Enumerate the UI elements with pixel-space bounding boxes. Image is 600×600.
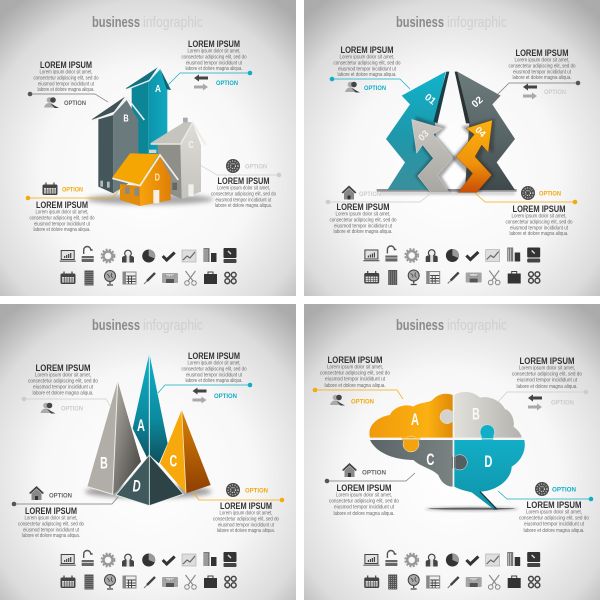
callout D: eiusmod tempor incididunt ut: [34, 222, 90, 228]
callout C: labore et dolore magna aliqua.: [217, 528, 275, 534]
callout A: labore et dolore magna aliqua.: [186, 66, 242, 72]
callout D: [26, 182, 122, 233]
callout 01: OPTION: [364, 85, 386, 92]
callout A: labore et dolore magna aliqua.: [324, 383, 386, 389]
callout B: LOREM IPSUM: [40, 60, 92, 70]
callout C: consectetur adipiscing elit, sed do: [213, 516, 279, 522]
callout B: labore et dolore magna aliqua.: [32, 390, 94, 396]
callout D: labore et dolore magna aliqua.: [524, 528, 584, 534]
callout 04: labore et dolore magna aliqua.: [510, 231, 568, 237]
pyramids illustration: [85, 352, 212, 506]
callout 03: OPTION: [359, 191, 381, 198]
icon rows: 00:235: [469, 578, 479, 582]
arrows illustration: 01: [422, 92, 438, 108]
brain illustration: C: [426, 450, 434, 469]
callout 01: [330, 45, 410, 92]
houses illustration: [87, 67, 213, 206]
callout 03: eiusmod tempor incididunt ut: [334, 224, 392, 230]
callout C: [325, 463, 415, 517]
icon rows: 00:235: [165, 274, 175, 278]
panel: houses: [0, 0, 296, 296]
callout A: LOREM IPSUM: [188, 39, 240, 49]
callout A: labore et dolore magna aliqua.: [186, 378, 242, 384]
callout C: eiusmod tempor incididunt ut: [218, 522, 274, 528]
pyramids illustration: A: [137, 416, 145, 435]
callout C: labore et dolore magna aliqua.: [334, 511, 394, 517]
callout 01: LOREM IPSUM: [340, 45, 394, 55]
callout D: LOREM IPSUM: [36, 200, 88, 210]
pyramids illustration: B: [100, 453, 108, 472]
callout A: LOREM IPSUM: [188, 351, 240, 361]
callout D: OPTION: [62, 186, 83, 194]
pyramids illustration: C: [169, 452, 177, 471]
icon rows: [60, 550, 236, 590]
callout D: Lorem ipsum dolor sit amet,: [36, 210, 89, 216]
callout C: consectetur adipiscing elit, sed do: [329, 498, 399, 504]
callout B: [22, 363, 111, 414]
icon rows: [60, 246, 236, 286]
callout D: eiusmod tempor incididunt ut: [524, 522, 584, 528]
callout 04: [475, 186, 577, 237]
brain illustration: B: [472, 404, 480, 423]
arrows illustration: 02: [470, 94, 486, 110]
callout A: [313, 355, 403, 406]
callout C: LOREM IPSUM: [336, 483, 392, 493]
callout A: consectetur adipiscing elit, sed do: [182, 366, 246, 372]
callout 03: Lorem ipsum dolor sit amet,: [336, 212, 391, 218]
callout 02: labore et dolore magna aliqua.: [512, 75, 572, 81]
callout C: [193, 483, 284, 534]
callout D: labore et dolore magna aliqua.: [34, 227, 90, 233]
houses illustration: B: [123, 114, 129, 125]
title: [396, 14, 507, 31]
callout A: Lorem ipsum dolor sit amet,: [327, 364, 383, 370]
callout 04: eiusmod tempor incididunt ut: [510, 226, 568, 232]
title: [92, 14, 203, 31]
icon rows: 00:235: [469, 274, 479, 278]
houses illustration: A: [155, 84, 161, 95]
callout D: LOREM IPSUM: [25, 506, 77, 516]
arrows illustration: 03: [416, 128, 431, 143]
callout B: labore et dolore magna aliqua.: [516, 384, 578, 390]
title: infographic: [447, 317, 507, 334]
callout 01: consectetur adipiscing elit, sed do: [334, 60, 400, 66]
callout B: OPTION: [61, 406, 83, 412]
callout D: Lorem ipsum dolor sit amet,: [526, 510, 582, 516]
callout C: Lorem ipsum dolor sit amet,: [220, 510, 273, 516]
pyramids illustration: D: [133, 477, 141, 496]
callout B: OPTION: [64, 100, 86, 107]
icon rows: [363, 246, 540, 285]
callout 03: [326, 186, 430, 235]
callout C: LOREM IPSUM: [218, 176, 270, 186]
title: infographic: [143, 317, 203, 334]
callout D: labore et dolore magna aliqua.: [22, 533, 80, 539]
callout A: OPTION: [214, 393, 237, 400]
callout 02: consectetur adipiscing elit, sed do: [508, 64, 576, 70]
callout A: OPTION: [216, 80, 238, 87]
houses illustration: C: [188, 140, 194, 151]
callout B: labore et dolore magna aliqua.: [38, 87, 94, 93]
callout C: [200, 159, 281, 209]
callout D: LOREM IPSUM: [526, 500, 582, 510]
callout C: eiusmod tempor incididunt ut: [334, 504, 394, 510]
title: infographic: [143, 14, 203, 31]
callout C: consectetur adipiscing elit, sed do: [211, 192, 276, 198]
callout D: OPTION: [552, 486, 576, 494]
callout 02: [497, 48, 580, 100]
callout B: consectetur adipiscing elit, sed do: [512, 372, 582, 378]
title: [396, 317, 507, 334]
callout D: eiusmod tempor incididunt ut: [23, 528, 79, 534]
callout 03: consectetur adipiscing elit, sed do: [330, 218, 396, 224]
title: business: [396, 14, 444, 31]
callout A: LOREM IPSUM: [328, 355, 382, 365]
callout A: Lorem ipsum dolor sit amet,: [188, 360, 241, 366]
callout 01: labore et dolore magna aliqua.: [338, 72, 396, 78]
callout A: consectetur adipiscing elit, sed do: [320, 370, 390, 376]
callout 04: OPTION: [539, 190, 561, 198]
title: business: [396, 317, 444, 334]
callout C: OPTION: [245, 488, 268, 494]
callout B: [498, 356, 588, 410]
callout C: OPTION: [362, 470, 386, 476]
callout D: Lorem ipsum dolor sit amet,: [24, 516, 78, 522]
callout 02: Lorem ipsum dolor sit amet,: [514, 58, 570, 64]
callout C: Lorem ipsum dolor sit amet,: [217, 186, 270, 192]
callout A: consectetur adipiscing elit, sed do: [182, 54, 246, 60]
arrows illustration: 04: [473, 125, 488, 140]
brain illustration: [369, 392, 525, 511]
callout B: consectetur adipiscing elit, sed do: [28, 378, 98, 384]
title: business: [92, 317, 140, 334]
callout 03: labore et dolore magna aliqua.: [334, 229, 392, 235]
callout 01: eiusmod tempor incididunt ut: [338, 66, 396, 72]
panel: brain puzzle: [304, 304, 600, 600]
callout 04: Lorem ipsum dolor sit amet,: [512, 214, 567, 220]
callout D: [498, 482, 593, 534]
callout D: consectetur adipiscing elit, sed do: [30, 216, 94, 222]
callout C: OPTION: [245, 164, 267, 170]
title: infographic: [447, 14, 507, 31]
callout A: OPTION: [351, 398, 374, 406]
callout 04: LOREM IPSUM: [512, 204, 566, 214]
callout C: LOREM IPSUM: [220, 501, 272, 511]
title: [92, 317, 203, 334]
callout 02: OPTION: [544, 89, 566, 96]
title: business: [92, 14, 140, 31]
callout 02: eiusmod tempor incididunt ut: [513, 70, 571, 76]
callout A: Lorem ipsum dolor sit amet,: [188, 48, 241, 54]
brain illustration: A: [411, 410, 419, 429]
callout B: eiusmod tempor incididunt ut: [38, 82, 94, 88]
callout 01: Lorem ipsum dolor sit amet,: [340, 54, 395, 60]
callout D: consectetur adipiscing elit, sed do: [519, 516, 589, 522]
callout B: LOREM IPSUM: [520, 356, 574, 366]
callout B: [28, 60, 108, 108]
callout B: OPTION: [551, 400, 574, 406]
callout B: LOREM IPSUM: [36, 363, 90, 373]
houses illustration: D: [155, 172, 160, 183]
arrows illustration: [377, 72, 517, 195]
callout 04: consectetur adipiscing elit, sed do: [506, 220, 572, 226]
panel: arrows: [304, 0, 600, 296]
callout 03: LOREM IPSUM: [336, 202, 390, 212]
callout A: eiusmod tempor incididunt ut: [186, 372, 242, 378]
panel: pyramids: [0, 304, 296, 600]
brain illustration: D: [484, 452, 492, 471]
callout B: Lorem ipsum dolor sit amet,: [519, 366, 575, 372]
icon rows: 00:235: [165, 578, 175, 582]
callout C: eiusmod tempor incididunt ut: [216, 198, 272, 204]
callout D: consectetur adipiscing elit, sed do: [18, 522, 84, 528]
callout B: Lorem ipsum dolor sit amet,: [35, 372, 91, 378]
callout C: Lorem ipsum dolor sit amet,: [336, 492, 392, 498]
callout B: Lorem ipsum dolor sit amet,: [40, 70, 93, 76]
callout A: [168, 39, 252, 90]
callout C: labore et dolore magna aliqua.: [215, 203, 272, 209]
icon rows: [363, 550, 540, 590]
callout A: [158, 351, 252, 404]
callout A: eiusmod tempor incididunt ut: [186, 60, 242, 66]
callout B: eiusmod tempor incididunt ut: [33, 384, 93, 390]
callout A: eiusmod tempor incididunt ut: [325, 376, 385, 382]
callout D: OPTION: [49, 492, 72, 500]
callout B: eiusmod tempor incididunt ut: [517, 378, 577, 384]
callout D: [12, 486, 118, 539]
callout 02: LOREM IPSUM: [516, 48, 568, 58]
callout B: consectetur adipiscing elit, sed do: [34, 76, 98, 82]
